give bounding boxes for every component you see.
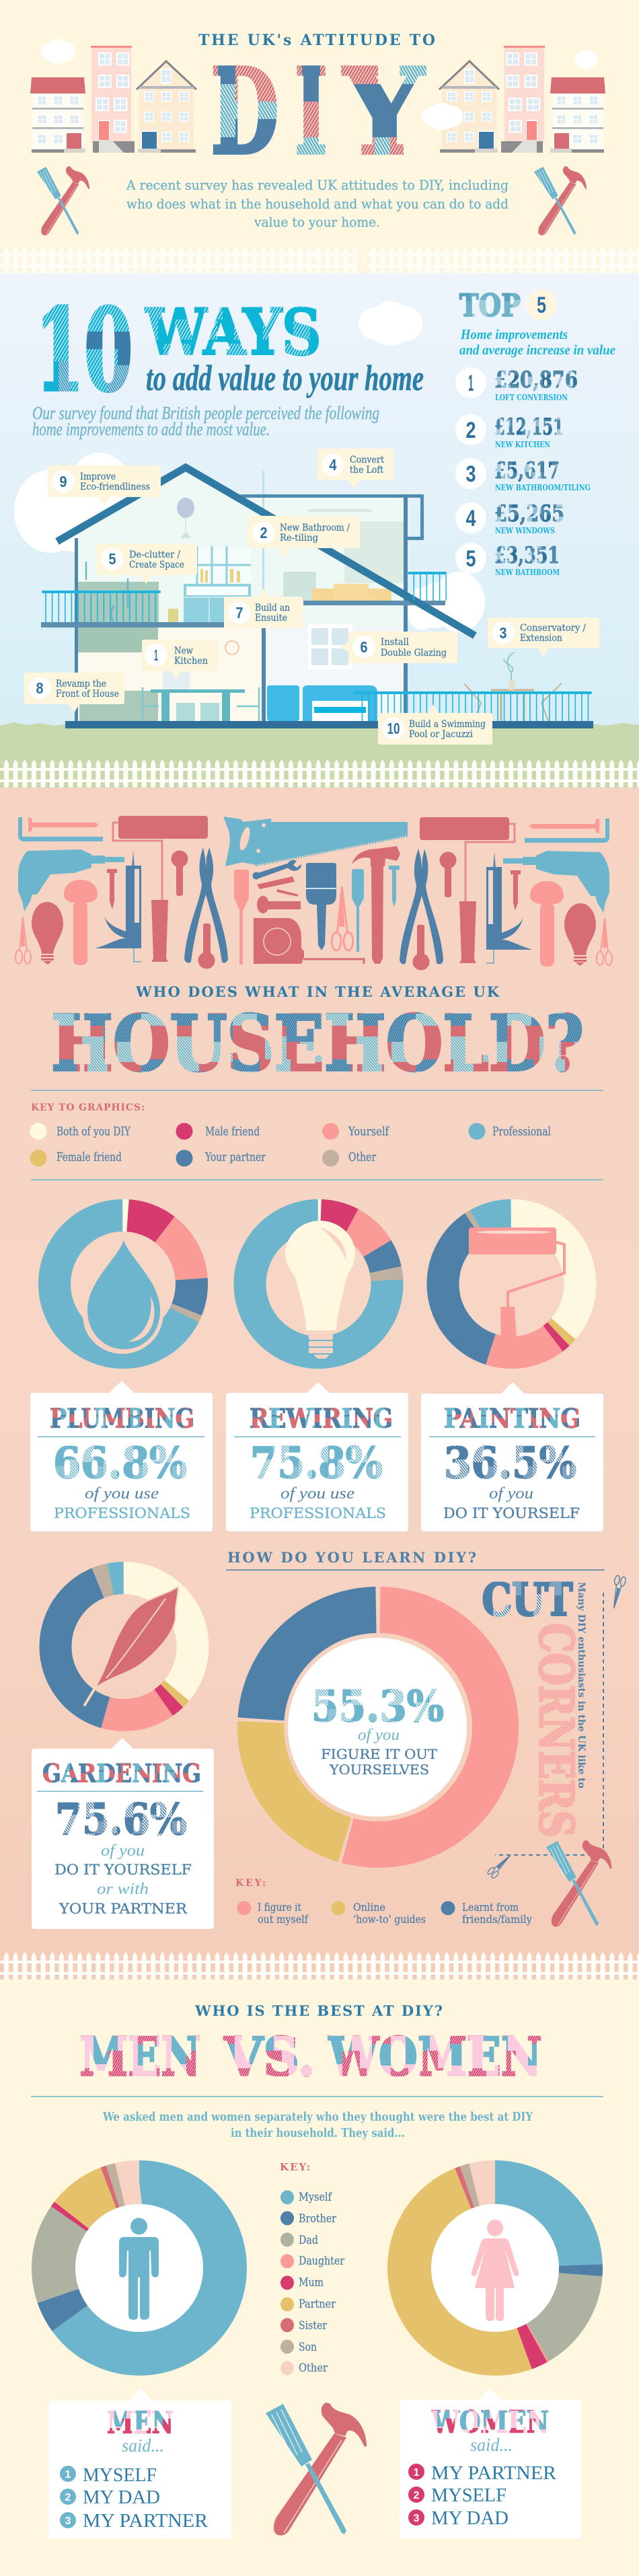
- paint roller: [113, 816, 208, 962]
- rank 4: 4: [465, 506, 476, 531]
- plumbing caption: PROFESSIONALS: [54, 1505, 190, 1521]
- key title: KEY:: [280, 2161, 310, 2173]
- callout 1: New: [174, 646, 193, 656]
- screw under pliers: [198, 923, 215, 969]
- rank 2: 2: [465, 418, 476, 443]
- donut: how you learn: [261, 1610, 495, 1844]
- key items: Other: [299, 2361, 328, 2375]
- icon: woman: [472, 2220, 519, 2321]
- survey description: Our survey found that British people perceived the following: [32, 403, 379, 423]
- centre caption: [321, 1727, 437, 1778]
- callout 1: [142, 640, 218, 680]
- hammer: [352, 846, 400, 964]
- centre caption: YOURSELVES: [329, 1761, 429, 1778]
- callout 2: Re-tiling: [280, 533, 318, 543]
- key items: Mum: [299, 2276, 324, 2289]
- legend items: Both of you DIY: [57, 1125, 130, 1139]
- roof: [57, 467, 475, 636]
- men said: said...: [122, 2435, 164, 2456]
- section: 10 ways: [14, 284, 615, 745]
- callout 2: New Bathroom /: [280, 523, 350, 533]
- rewiring value: 75.8%: [250, 1438, 383, 1488]
- callout 4: 4: [330, 456, 337, 473]
- women ranking: MY PARTNER: [431, 2463, 556, 2484]
- callout 8: [24, 673, 124, 713]
- icon: crossed tools left: [37, 166, 89, 235]
- wrench: [253, 860, 301, 880]
- men ranking: MY DAD: [83, 2487, 160, 2508]
- gardening caption: DO IT YOURSELF: [54, 1862, 192, 1878]
- women ranking: [408, 2463, 556, 2529]
- intro text: A recent survey has revealed UK attitudes to DIY, including: [126, 177, 509, 193]
- callout 4: Convert: [350, 455, 384, 465]
- plumbing value: 66.8%: [53, 1438, 187, 1488]
- subtitle script: to add value to your home: [146, 358, 424, 398]
- rank 5: 5: [465, 546, 476, 572]
- corners heading: CORNERS: [529, 1623, 584, 1838]
- callout 7: [224, 589, 303, 628]
- icon: crossed tools right: [534, 166, 587, 235]
- cut corners feature: [482, 1574, 626, 1927]
- women ranking: 2: [414, 2490, 420, 2501]
- icon: water drop: [83, 1240, 163, 1354]
- key items: friends/family: [462, 1913, 533, 1926]
- interior items: [77, 471, 424, 721]
- callout 5: [97, 543, 197, 584]
- donut: men: [54, 2182, 225, 2354]
- rank 3: NEW BATHROOM/TILING: [495, 483, 591, 492]
- callout 10: Build a Swimming: [409, 719, 486, 730]
- painting title: PAINTING: [444, 1403, 580, 1434]
- painting caption: [443, 1485, 580, 1521]
- legend items: Other: [348, 1150, 376, 1164]
- gardening value: 75.6%: [55, 1794, 187, 1845]
- survey description: home improvements to add the most value.: [32, 419, 270, 439]
- rank 1: LOFT CONVERSION: [495, 393, 568, 402]
- donut: gardening: [55, 1578, 192, 1715]
- house B: [91, 46, 135, 153]
- key items: out myself: [258, 1913, 309, 1926]
- title small: THE UK's ATTITUDE TO: [198, 32, 435, 49]
- rank 4: [455, 500, 564, 535]
- top 5 heading: TOP: [459, 287, 521, 324]
- callout 5: De-clutter /: [129, 550, 181, 560]
- key items: Partner: [299, 2298, 336, 2311]
- plumbing title: PLUMBING: [50, 1403, 194, 1434]
- cut corners text: Many DIY enthusiasts in the UK like to: [576, 1582, 587, 1788]
- big DIY title: I: [295, 43, 328, 182]
- big DIY title: [211, 43, 425, 182]
- gardening caption: or with: [97, 1881, 149, 1898]
- women ranking: MY DAD: [431, 2508, 509, 2529]
- legend title: KEY TO GRAPHICS:: [31, 1102, 145, 1113]
- dashed cut line: [495, 1593, 603, 1855]
- rank 4: £5,265: [494, 500, 564, 527]
- rank 3: 3: [465, 461, 476, 487]
- fence 3: [0, 1952, 639, 1979]
- question heading: WHO IS THE BEST AT DIY?: [194, 2002, 443, 2019]
- icon: scissors top: [608, 1575, 626, 1609]
- men ranking: 1: [65, 2469, 71, 2480]
- legend: learning key: [235, 1878, 533, 1926]
- big screw: [64, 880, 98, 965]
- callout 3: Conservatory /: [520, 623, 587, 634]
- callout 6: [340, 632, 457, 663]
- header section: [30, 32, 605, 235]
- allen key: [18, 817, 103, 841]
- big DIY title: D: [211, 43, 279, 182]
- top 5 subheading: and average increase in value: [459, 342, 615, 358]
- side tools right: [400, 817, 612, 970]
- balcony railings: [42, 572, 447, 622]
- card: gardening: [32, 1738, 214, 1929]
- heading small: WHO DOES WHAT IN THE AVERAGE UK: [135, 983, 500, 1000]
- WAYS heading: WAYS: [145, 296, 322, 370]
- rank 3: [455, 457, 591, 492]
- callout 1: 1: [154, 646, 158, 664]
- key items: Daughter: [299, 2255, 345, 2268]
- tools illustration: [15, 816, 612, 970]
- clouds: [41, 39, 597, 69]
- rank 5: NEW BATHROOM: [495, 568, 560, 577]
- legend items: Professional: [492, 1125, 551, 1139]
- centre caption: of you: [358, 1727, 400, 1744]
- callout 3: [488, 617, 599, 657]
- legend items: Male friend: [205, 1125, 260, 1139]
- callout 7: 7: [235, 604, 243, 621]
- plumbing caption: [54, 1485, 190, 1521]
- icon: large crossed tools: [266, 2402, 367, 2536]
- saw: [223, 817, 408, 866]
- blue screwdriver: [352, 869, 364, 952]
- survey intro text: [102, 2110, 533, 2140]
- callout 9: 9: [59, 473, 67, 490]
- donut centre: [288, 1638, 467, 1817]
- callout 2: [248, 516, 360, 557]
- gardening title: GARDENING: [42, 1758, 201, 1788]
- scissors: [15, 917, 31, 964]
- rewiring caption: PROFESSIONALS: [250, 1505, 386, 1521]
- rank 2: [455, 414, 564, 449]
- rank 1: £20,876: [494, 367, 578, 393]
- donut: plumbing: [54, 1215, 192, 1354]
- icon: paint roller: [469, 1227, 564, 1349]
- survey description: [32, 403, 379, 439]
- house walls: [75, 494, 408, 721]
- men vs women heading: [79, 2002, 542, 2088]
- callout 9: Eco-friendliness: [80, 482, 150, 492]
- card: plumbing: [30, 1381, 213, 1531]
- survey intro text: We asked men and women separately who they thought were the best at DIY: [102, 2110, 533, 2124]
- callout 9: [48, 465, 161, 506]
- plumbing caption: of you use: [85, 1485, 159, 1503]
- rank 2: NEW KITCHEN: [495, 440, 550, 449]
- survey intro text: in their household. They said...: [231, 2126, 405, 2140]
- floor slabs: [41, 601, 593, 728]
- 10 numeral: 10: [35, 284, 133, 417]
- women ranking: MYSELF: [431, 2485, 506, 2506]
- men vs women title: VS.: [224, 2026, 315, 2088]
- section background: pink household: [0, 788, 639, 1979]
- cloud in front of house: [422, 103, 463, 130]
- icon: scissors bottom: [487, 1852, 514, 1879]
- clouds behind house: [14, 453, 485, 632]
- icon: crossed tools: [546, 1840, 612, 1927]
- callout 6: Double Glazing: [381, 648, 447, 658]
- gardening caption: of you: [101, 1842, 145, 1860]
- heading: how do you learn DIY: HOW DO YOU LEARN DIY?: [227, 1549, 476, 1566]
- rank 5: £3,351: [494, 542, 560, 569]
- callout 10: [378, 705, 492, 745]
- card: women said: [400, 2388, 581, 2538]
- callout 7: Build an: [255, 603, 290, 613]
- men title: MEN: [107, 2405, 174, 2440]
- callout 6: Install: [381, 637, 409, 648]
- painting caption: of you: [489, 1485, 533, 1503]
- patio railing: [354, 691, 592, 721]
- paintbrush: [306, 863, 336, 950]
- callout 5: 5: [109, 550, 116, 568]
- rewiring caption: of you use: [280, 1485, 354, 1503]
- callout 7: Ensuite: [255, 613, 287, 623]
- men vs women title: [79, 2026, 542, 2088]
- legend items: Your partner: [204, 1150, 266, 1164]
- rank 4: NEW WINDOWS: [495, 526, 555, 535]
- men vs women title: MEN: [79, 2026, 200, 2088]
- bolts: [257, 876, 301, 913]
- legend items: Female friend: [57, 1150, 122, 1164]
- men ranking: MY PARTNER: [83, 2511, 208, 2532]
- section background: cream header: [0, 0, 639, 273]
- rank 5: [455, 542, 560, 577]
- gardening caption: [54, 1842, 192, 1917]
- men ranking: 3: [65, 2515, 71, 2527]
- donut: women: [409, 2182, 581, 2354]
- pink screwdriver: [234, 870, 249, 964]
- women title: WOMEN: [431, 2404, 549, 2440]
- houses right: [439, 46, 605, 153]
- women said: said...: [470, 2435, 513, 2455]
- callout 1: Kitchen: [174, 656, 208, 667]
- key items: Online: [353, 1901, 385, 1914]
- houses left: [30, 46, 196, 153]
- gardening caption: YOUR PARTNER: [59, 1901, 188, 1917]
- long nail: [28, 817, 99, 832]
- tape measure: [254, 918, 364, 964]
- fence 2: [0, 759, 639, 788]
- key items: Dad: [299, 2234, 318, 2247]
- rank 3: £5,617: [494, 457, 560, 484]
- callout 10: Pool or Jacuzzi: [409, 729, 473, 740]
- rank 2: £12,151: [494, 414, 564, 441]
- men ranking: MYSELF: [83, 2465, 157, 2486]
- intro text: value to your home.: [254, 214, 380, 230]
- fence 1: [0, 245, 639, 273]
- household heading: [51, 983, 584, 1088]
- intro text: [126, 177, 509, 230]
- key title: KEY:: [235, 1878, 266, 1889]
- key items: [237, 1901, 533, 1926]
- card: rewiring: [226, 1382, 408, 1531]
- legend: key to graphics: [30, 1102, 551, 1166]
- donut: rewiring: [250, 1215, 387, 1359]
- cut heading: CUT: [482, 1574, 573, 1626]
- house A: [30, 77, 85, 153]
- callout 8: Front of House: [56, 689, 119, 699]
- caulk gun: [95, 851, 141, 962]
- callout 10: 10: [387, 720, 400, 737]
- callout 5: Create Space: [129, 560, 184, 570]
- card: painting: [421, 1382, 603, 1531]
- key items: I figure it: [258, 1901, 301, 1914]
- women ranking: 1: [414, 2467, 420, 2478]
- blue nail: [389, 866, 400, 907]
- icon: light bulb: [285, 1221, 355, 1359]
- callout 9: Improve: [80, 471, 116, 482]
- small nail: [107, 869, 117, 909]
- intro text: who does what in the household and what you can do to add: [126, 196, 509, 212]
- top 5 panel: [455, 287, 615, 577]
- key items: Brother: [299, 2212, 337, 2226]
- men ranking: 2: [65, 2492, 71, 2503]
- rewiring title: REWIRING: [250, 1403, 393, 1434]
- pliers: [184, 847, 228, 963]
- key items: Myself: [299, 2191, 332, 2204]
- callout 8: Revamp the: [56, 679, 106, 689]
- callout 3: Extension: [520, 633, 562, 644]
- scissors center: [332, 886, 353, 950]
- callout 3: 3: [499, 624, 507, 642]
- house illustration: [14, 449, 599, 745]
- key items: ‘how-to’ guides: [353, 1913, 426, 1926]
- top 5 subheading: [459, 326, 615, 358]
- cloud top: [359, 301, 422, 346]
- centre value: 55.3%: [311, 1681, 444, 1732]
- legend items: [30, 1123, 551, 1166]
- painting caption: DO IT YOURSELF: [443, 1505, 580, 1521]
- section background: blue sky: [0, 273, 639, 744]
- card: men said: [49, 2388, 231, 2539]
- key items: Sister: [299, 2319, 328, 2333]
- grass: [0, 722, 639, 794]
- key items: Son: [299, 2341, 317, 2354]
- men ranking: [60, 2465, 208, 2532]
- rewiring caption: [250, 1485, 386, 1521]
- icon: leaf: [85, 1587, 178, 1705]
- women ranking: 3: [414, 2513, 420, 2524]
- men vs women title: WOMEN: [328, 2026, 542, 2088]
- callout 4: the Loft: [350, 465, 383, 476]
- top 5 subheading: Home improvements: [460, 326, 568, 342]
- donut: painting: [443, 1215, 580, 1353]
- top 5 heading: 5: [537, 293, 546, 318]
- callouts: [24, 449, 599, 745]
- painting value: 36.5%: [444, 1438, 576, 1488]
- legend: who is best: [280, 2161, 345, 2376]
- big DIY title: Y: [342, 43, 425, 182]
- centre caption: FIGURE IT OUT: [321, 1746, 437, 1762]
- icon: man: [119, 2218, 159, 2320]
- callout 4: [317, 449, 393, 489]
- rank 1: [455, 367, 578, 402]
- callout 6: 6: [361, 638, 367, 656]
- section background: cream men vs women: [0, 1979, 639, 2576]
- screw: [171, 850, 188, 896]
- callout 8: 8: [36, 679, 44, 697]
- key items: Learnt from: [462, 1901, 519, 1914]
- house C: [137, 61, 196, 153]
- callout 2: 2: [260, 524, 268, 541]
- side tools left: [15, 816, 228, 969]
- legend items: Yourself: [348, 1125, 389, 1139]
- rank 1: 1: [468, 371, 474, 396]
- key items: [280, 2190, 345, 2376]
- drill: [18, 849, 124, 911]
- outdoor table and plant: [464, 652, 562, 721]
- light bulb: [32, 902, 63, 964]
- house interior: [78, 469, 404, 721]
